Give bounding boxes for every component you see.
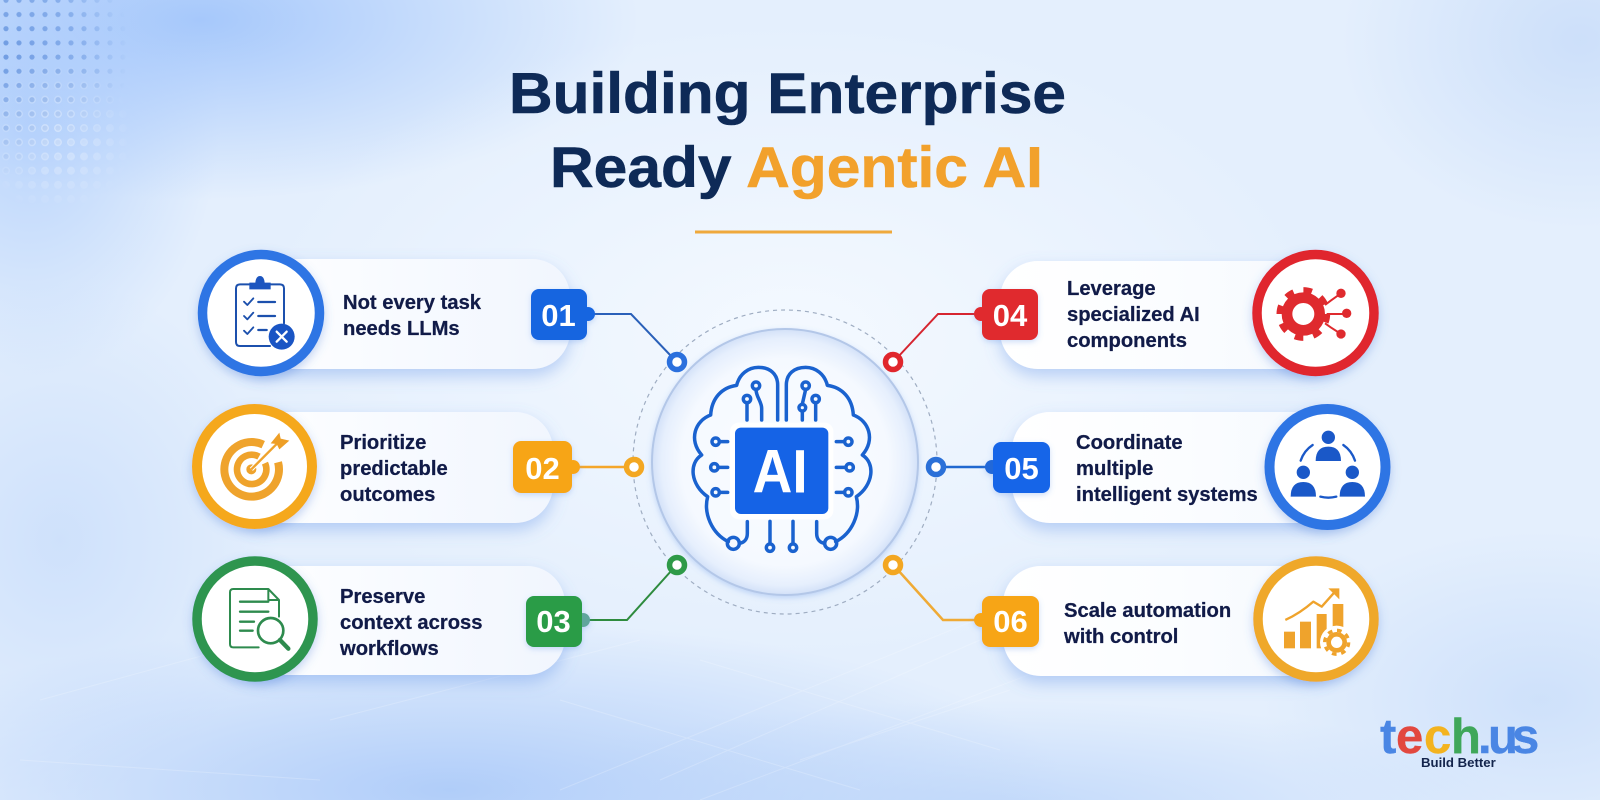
item 01 (202, 254, 684, 372)
connector 05 (942, 466, 990, 468)
logo: . (1478, 710, 1492, 764)
connector 06 (897, 569, 978, 620)
title: Ready Agentic AI (550, 136, 1043, 200)
label 02: Prioritize (340, 432, 426, 454)
logo: t (1380, 710, 1396, 764)
icon: growth chart with gear (1284, 588, 1353, 659)
badge 06: 06 (993, 604, 1028, 639)
node 05 (928, 460, 944, 474)
pill 03 (230, 566, 565, 675)
item 05 (928, 409, 1386, 525)
badge 04 (974, 289, 1038, 340)
pill 01 (230, 259, 570, 369)
badge 02 (513, 441, 580, 493)
label 06: with control (1063, 626, 1178, 648)
label 02: predictable (340, 458, 448, 480)
title: Building Enterprise (509, 62, 1066, 126)
label 05: intelligent systems (1076, 484, 1258, 506)
icon: document search (230, 589, 288, 649)
label 04 (1067, 278, 1200, 352)
label 02: outcomes (340, 484, 435, 506)
label 01 (343, 292, 482, 340)
logo: u (1488, 710, 1518, 764)
logo (1380, 710, 1539, 770)
ring 04 (1257, 254, 1374, 372)
logo: Build Better (1421, 755, 1496, 770)
item 06 (886, 558, 1374, 677)
ring 05 (1270, 409, 1386, 525)
badge 05: 05 (1004, 451, 1039, 486)
connector 02 (575, 466, 628, 468)
label 06 (1063, 600, 1231, 648)
icon: target (224, 433, 289, 497)
label 05 (1076, 432, 1258, 506)
badge 03: 03 (536, 604, 571, 639)
badge 03 (526, 596, 590, 647)
badge 06 (974, 596, 1039, 647)
badge 01 (531, 289, 595, 340)
label 05: Coordinate (1076, 432, 1183, 454)
label 03: Preserve (340, 586, 425, 608)
ring 02 (197, 409, 312, 524)
icon: team network (1291, 431, 1365, 498)
node 06 (886, 558, 900, 572)
logo: c (1424, 710, 1451, 764)
label 03: context across (340, 612, 482, 634)
label 04: Leverage (1067, 278, 1156, 300)
node 03 (670, 558, 684, 572)
icon: AI brain chip (693, 367, 871, 551)
node 04 (886, 354, 900, 370)
ring 03 (197, 561, 313, 677)
logo: h (1451, 710, 1481, 764)
logo: e (1396, 710, 1423, 764)
badge 05 (985, 442, 1050, 493)
connector 04 (897, 314, 978, 358)
pill 04 (1000, 261, 1340, 369)
logo: s (1512, 710, 1539, 764)
connector 01 (590, 314, 672, 357)
label 01: Not every task (343, 292, 482, 314)
node 02 (626, 460, 642, 474)
node 01 (670, 354, 684, 370)
label 04: specialized AI (1067, 304, 1200, 326)
title divider (695, 230, 892, 234)
ring 06 (1258, 561, 1374, 677)
label 04: components (1067, 330, 1187, 352)
halftone dot pattern (2, 0, 112, 185)
title (509, 62, 1066, 200)
badge 04: 04 (993, 298, 1028, 333)
dashed orbit ring (633, 310, 937, 614)
item 04 (886, 254, 1374, 372)
label 03: workflows (339, 638, 439, 660)
label 06: Scale automation (1064, 600, 1231, 622)
label 01: needs LLMs (343, 318, 460, 340)
pill 02 (230, 412, 553, 523)
icon: gear network (1279, 289, 1351, 339)
pill 05 (1012, 412, 1352, 523)
central disc (652, 329, 918, 595)
connector 03 (588, 570, 672, 620)
icon: clipboard (236, 276, 295, 350)
item 03 (197, 558, 684, 677)
badge 02: 02 (525, 451, 560, 486)
item 02 (197, 409, 642, 524)
label 02 (340, 432, 448, 506)
icon: AI brain chip: AI (753, 437, 808, 506)
badge 01: 01 (541, 298, 576, 333)
ring 01 (202, 254, 320, 372)
label 05: multiple (1076, 458, 1153, 480)
label 03 (339, 586, 482, 660)
pill 06 (1003, 566, 1343, 676)
